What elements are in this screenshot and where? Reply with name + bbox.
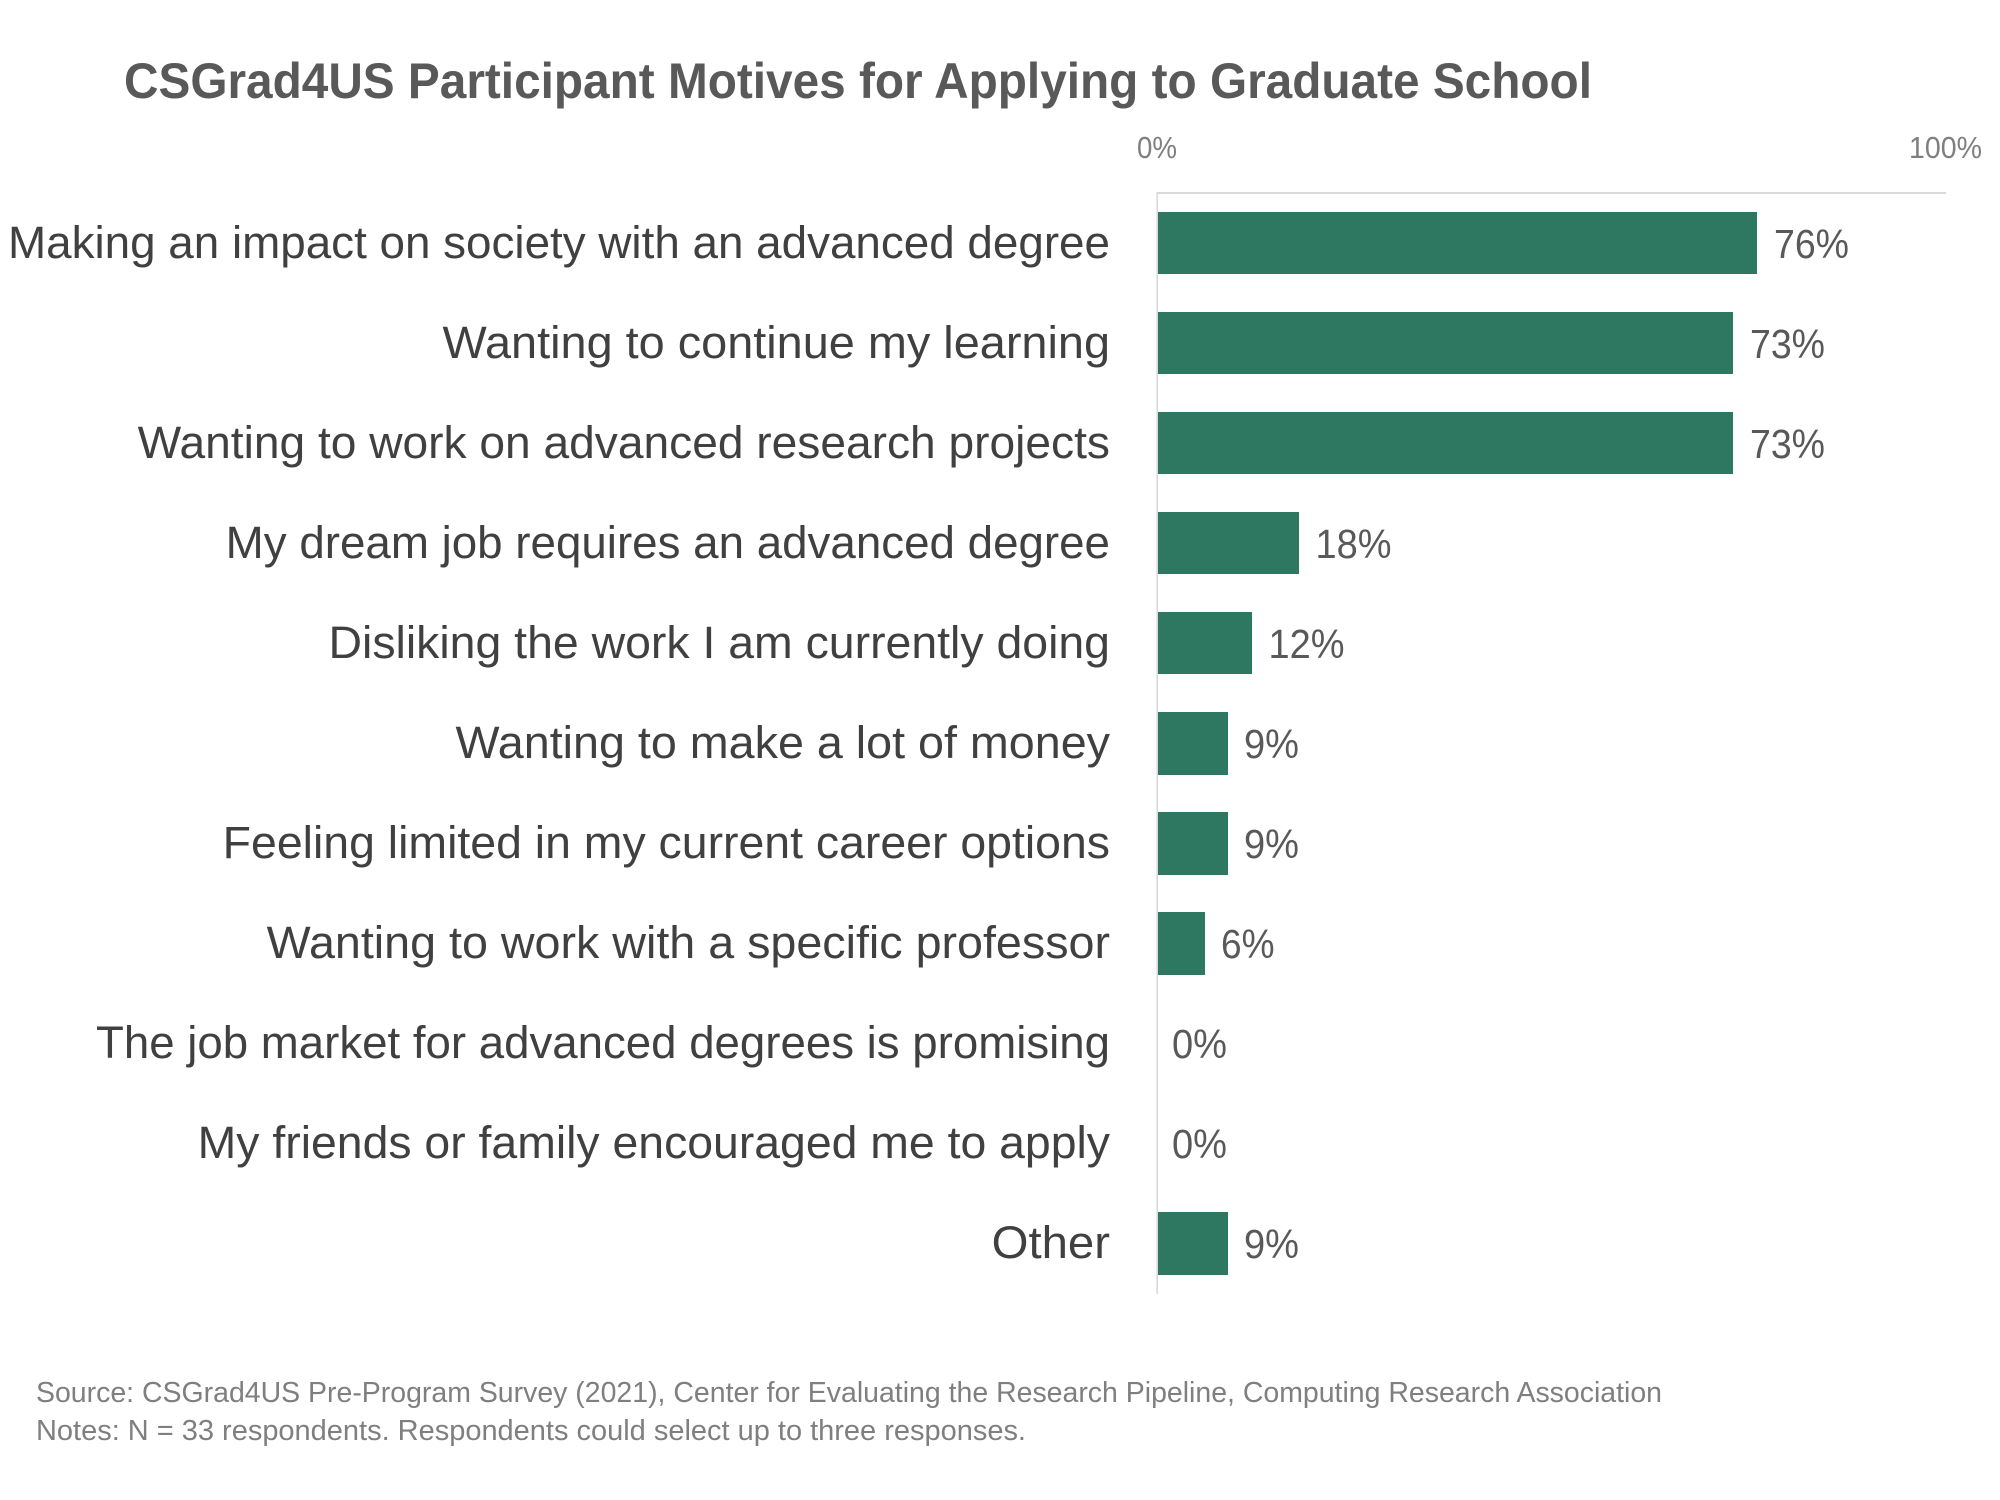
x axis labels: 100% (1909, 130, 1982, 165)
axis lines (1156, 192, 1946, 1294)
source and notes (36, 1377, 1662, 1447)
row: research projects: 73% (1750, 421, 1825, 467)
row: job market: The job market for advanced degrees is promising (96, 1017, 1110, 1068)
row: dream job: 18% (1316, 521, 1392, 567)
x axis labels: 0% (1137, 130, 1177, 165)
row: friends or family: My friends or family encouraged me to apply (198, 1117, 1111, 1168)
row: limited career options: Feeling limited in my current career options (223, 817, 1110, 868)
bar chart (8, 130, 1982, 1294)
row: making an impact (8, 212, 1849, 274)
source and notes: Source: CSGrad4US Pre-Program Survey (2021), Center for Evaluating the Research Pipeline, Computing Research Association (36, 1377, 1662, 1409)
row: dream job: My dream job requires an advanced degree (226, 517, 1110, 568)
row: disliking work: 12% (1268, 621, 1344, 667)
row: continue learning (442, 312, 1825, 374)
row: job market: 0% (1172, 1021, 1227, 1067)
row: disliking work: Disliking the work I am currently doing (328, 617, 1110, 668)
row: money: 9% (1244, 721, 1299, 767)
row: disliking work (328, 612, 1344, 674)
row: limited career options: 9% (1244, 821, 1299, 867)
row: research projects (138, 412, 1825, 474)
row: specific professor: Wanting to work with a specific professor (267, 917, 1110, 968)
x axis labels (1137, 130, 1982, 165)
row: other: 9% (1244, 1221, 1299, 1267)
row: other (992, 1212, 1299, 1275)
row: money: Wanting to make a lot of money (456, 717, 1111, 768)
row: other: Other (992, 1217, 1110, 1268)
row: specific professor (267, 912, 1274, 975)
title: CSGrad4US Participant Motives for Applying to Graduate School (124, 53, 1592, 109)
source and notes: Notes: N = 33 respondents. Respondents could select up to three responses. (36, 1415, 1026, 1447)
row: making an impact: 76% (1774, 221, 1849, 267)
row: research projects: Wanting to work on advanced research projects (138, 417, 1110, 468)
row: specific professor: 6% (1221, 921, 1274, 967)
row: continue learning: Wanting to continue my learning (442, 317, 1110, 368)
row: friends or family: 0% (1172, 1121, 1227, 1167)
row: making an impact: Making an impact on society with an advanced degree (8, 217, 1110, 268)
row: continue learning: 73% (1750, 321, 1825, 367)
row: dream job (226, 512, 1392, 574)
row: money (456, 712, 1299, 775)
row: limited career options (223, 812, 1299, 875)
